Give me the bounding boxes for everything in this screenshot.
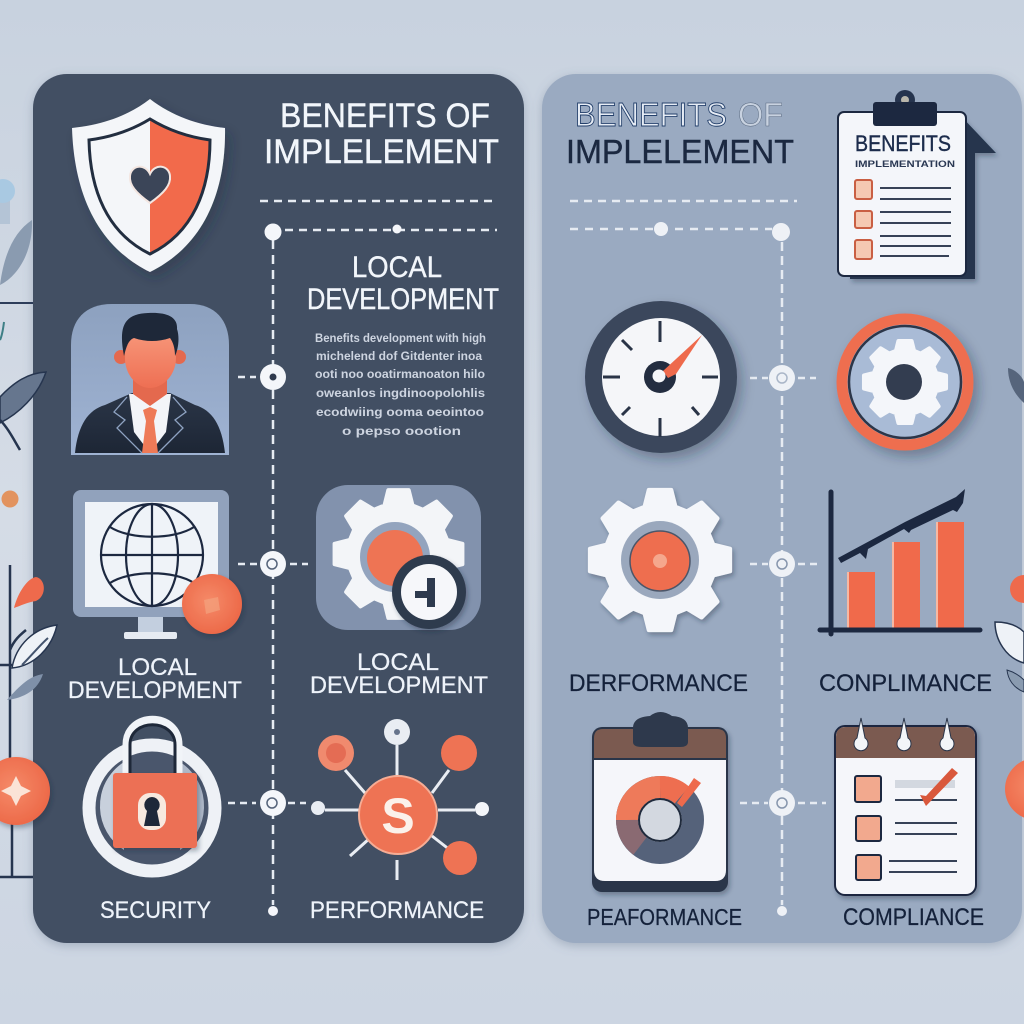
label: performance left: PERFORMANCE [310, 897, 484, 924]
icon: monitor with globe [73, 490, 242, 639]
heading: benefits of implement right [566, 96, 794, 170]
right edge plant decoration [995, 368, 1024, 820]
label: peaformance: PEAFORMANCE [587, 904, 742, 930]
icon: clipboard checklist: BENEFITS [855, 131, 951, 156]
heading: benefits of implement [264, 97, 499, 171]
text block: description: Benefits development with high [315, 333, 486, 345]
label: local development 2: DEVELOPMENT [310, 672, 488, 699]
icon: person in suit [71, 304, 229, 455]
text block: description: ooti noo ooatirmanoaton hilo [315, 369, 485, 381]
icon: speed gauge [585, 301, 737, 453]
label: local development 1: LOCAL [118, 654, 197, 681]
text block: description: oweanlos ingdinoopolohlis [316, 388, 485, 400]
icon: shield with heart [72, 99, 225, 272]
label: local development 2: LOCAL [357, 649, 439, 676]
panel: left dark [33, 74, 524, 943]
panel: right light [542, 74, 1022, 943]
text block: description: michelend dof Gitdenter inoa [316, 351, 483, 363]
heading: local development [307, 251, 499, 316]
heading: benefits of implement right: IMPLELEMENT [566, 133, 794, 170]
icon: large gear [590, 490, 730, 630]
label: derformance: DERFORMANCE [569, 670, 748, 697]
label: conplimance: CONPLIMANCE [819, 670, 992, 697]
heading: local development: DEVELOPMENT [307, 283, 499, 316]
icon: clipboard checklist: IMPLEMENTATION [855, 159, 955, 169]
label: security: SECURITY [100, 897, 211, 924]
icon: network hub [311, 719, 489, 880]
heading: local development: LOCAL [352, 251, 442, 284]
heading: benefits of implement right: OF [738, 96, 783, 133]
icon: network hub: S [381, 788, 415, 844]
label: local development 1: DEVELOPMENT [68, 677, 242, 704]
heading: benefits of implement right: BENEFITS [575, 96, 727, 133]
icon: calendar checklist [835, 718, 976, 895]
text block: description [315, 333, 486, 438]
label: local development 2 [310, 649, 488, 699]
icon: calendar with donut chart [592, 712, 728, 892]
timeline: right [570, 201, 826, 916]
icon: padlock in ring [89, 720, 215, 871]
heading: benefits of implement: IMPLELEMENT [264, 133, 499, 171]
timeline: left [228, 201, 497, 916]
icon: clipboard checklist [838, 90, 996, 279]
icon: gear in orange ring [842, 319, 968, 445]
icon: gear with clock [316, 485, 481, 630]
icon: rising bar chart [820, 489, 980, 634]
heading: benefits of implement: BENEFITS OF [280, 97, 490, 135]
text block: description: ecodwiing ooma oeointoo [316, 407, 484, 419]
label: compliance: COMPLIANCE [843, 904, 984, 931]
text block: description: o pepso oootion [342, 426, 461, 438]
left edge plant decoration [0, 179, 57, 877]
label: local development 1 [68, 654, 242, 704]
